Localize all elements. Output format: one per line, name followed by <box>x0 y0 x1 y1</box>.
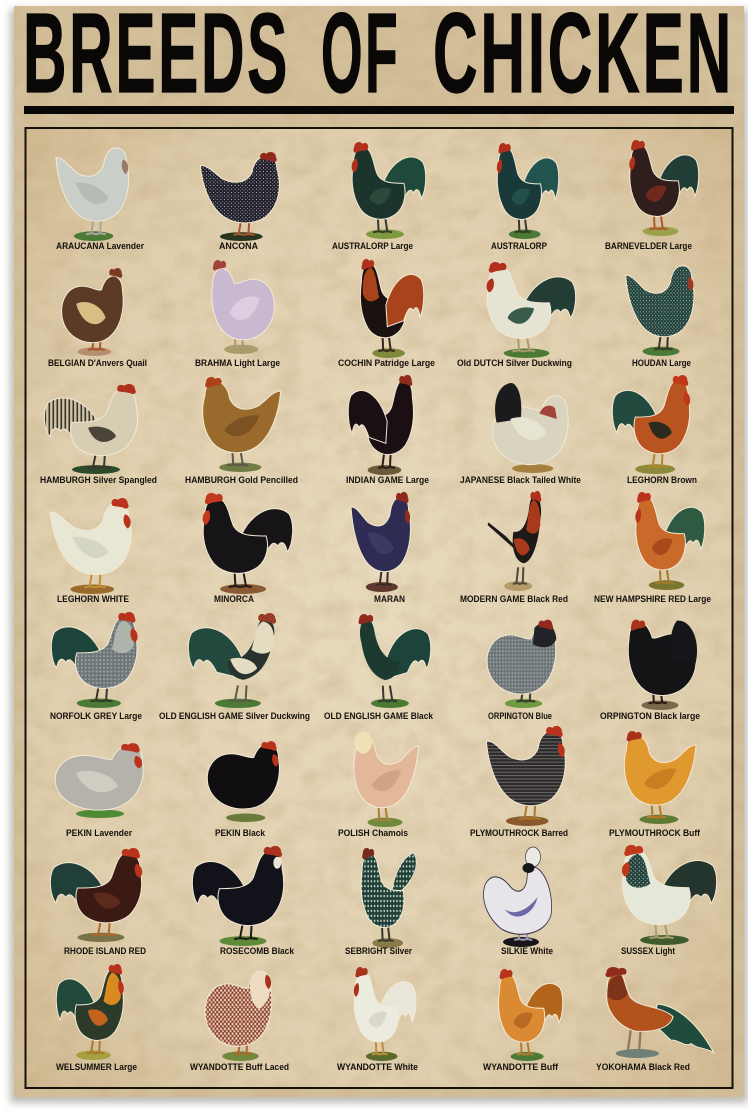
breed: Indian Game Large: INDIAN GAME Large <box>346 475 429 485</box>
breed: Araucana Lavender <box>56 148 144 251</box>
breed: Brahma Light Large <box>195 260 280 368</box>
breed: Yokohama Black Red: YOKOHAMA Black Red <box>596 1062 690 1072</box>
breed: Hamburgh Gold Pencilled: HAMBURGH Gold Pencilled <box>185 475 298 485</box>
breed: Polish Chamois <box>338 731 419 838</box>
breed: Wyandotte White: WYANDOTTE White <box>337 1062 418 1072</box>
breed: Leghorn Brown: LEGHORN Brown <box>627 475 697 485</box>
breed: Pekin Black <box>207 741 279 838</box>
breed: Wyandotte White <box>337 967 418 1072</box>
breed: Maran: MARAN <box>374 594 405 604</box>
breed: Barnevelder Large: BARNEVELDER Large <box>605 241 692 251</box>
breed: Leghorn White <box>50 498 131 604</box>
breed: Belgian D'Anvers Quail <box>48 268 147 368</box>
breed: Pekin Black: PEKIN Black <box>215 828 266 838</box>
breed: Modern Game Black Red <box>460 491 568 604</box>
breed: Cochin Partridge Large <box>338 259 435 368</box>
title rule <box>24 106 734 114</box>
breed: Rhode Island Red <box>50 848 146 956</box>
breed: Ancona: ANCONA <box>219 241 258 251</box>
breed: Indian Game Large <box>346 375 429 485</box>
breed: Rosecomb Black <box>192 846 295 956</box>
breed: Orpington Blue: ORPINGTON Blue <box>488 711 552 721</box>
breed: Old English Game Silver Duckwing: OLD ENGLISH GAME Silver Duckwing <box>159 711 310 721</box>
breed: Australorp Large: AUSTRALORP Large <box>332 241 413 251</box>
breed: Leghorn White: LEGHORN WHITE <box>57 594 129 604</box>
breed: Norfolk Grey Large: NORFOLK GREY Large <box>50 711 142 721</box>
breed: Minorca: MINORCA <box>214 594 254 604</box>
breed: Norfolk Grey Large <box>50 612 142 721</box>
breed: Australorp Large <box>332 142 426 251</box>
breed: Cochin Partridge Large: COCHIN Patridge Large <box>338 358 435 368</box>
breed: Wyandotte Buff <box>483 969 563 1072</box>
breed: Orpington Black Large: ORPINGTON Black large <box>600 711 700 721</box>
breed: Houdan Large: HOUDAN Large <box>632 358 691 368</box>
breed: Pekin Lavender: PEKIN Lavender <box>66 828 132 838</box>
breed: Barnevelder Large <box>605 140 699 251</box>
breed: Rhode Island Red: RHODE ISLAND RED <box>64 946 146 956</box>
breed: Welsummer Large: WELSUMMER Large <box>56 1062 137 1072</box>
breed: Australorp <box>491 143 559 251</box>
breed: Orpington Black Large <box>600 620 700 721</box>
breed: Hamburgh Gold Pencilled <box>185 377 298 485</box>
breed: Sussex Light <box>621 845 717 956</box>
breed: Belgian D'Anvers Quail: BELGIAN D'Anvers Quail <box>48 358 147 368</box>
breed: Wyandotte Buff Laced <box>190 970 289 1072</box>
breed: Sebright Silver: SEBRIGHT Silver <box>345 946 412 956</box>
breed: Plymouth Rock Barred: PLYMOUTHROCK Barred <box>470 828 568 838</box>
breed: Welsummer Large <box>56 964 137 1072</box>
breed: Minorca <box>203 493 293 604</box>
breed: New Hampshire Red Large <box>594 492 711 604</box>
breed: Old English Game Silver Duckwing <box>159 613 310 721</box>
breed: Old Dutch Silver Duckwing <box>457 262 576 368</box>
breed: Rosecomb Black: ROSECOMB Black <box>220 946 295 956</box>
breed: Old English Game Black <box>324 614 434 721</box>
breed: Plymouth Rock Buff <box>609 731 701 838</box>
breed: Houdan Large <box>626 266 694 368</box>
breed: Wyandotte Buff Laced: WYANDOTTE Buff Laced <box>190 1062 289 1072</box>
breed: Silkie White <box>484 847 553 956</box>
breed: Araucana Lavender: ARAUCANA Lavender <box>56 241 144 251</box>
breed: Old English Game Black: OLD ENGLISH GAME Black <box>324 711 434 721</box>
breed: New Hampshire Red Large: NEW HAMPSHIRE RED Large <box>594 594 711 604</box>
breed: Wyandotte Buff: WYANDOTTE Buff <box>483 1062 559 1072</box>
breed: Old Dutch Silver Duckwing: Old DUTCH Silver Duckwing <box>457 358 572 368</box>
breed: Hamburgh Silver Spangled <box>40 384 157 485</box>
breed: Leghorn Brown <box>612 375 697 485</box>
breed: Australorp: AUSTRALORP <box>491 241 547 251</box>
breed: Japanese Black Tailed White <box>460 383 581 485</box>
breed: Orpington Blue <box>487 620 556 721</box>
breed: Maran <box>351 492 410 604</box>
breed: Ancona <box>200 152 279 251</box>
breed: Yokohama Black Red <box>596 967 714 1072</box>
breed: Modern Game Black Red: MODERN GAME Black Red <box>460 594 568 604</box>
breed: Plymouth Rock Barred <box>470 726 568 838</box>
breed: Japanese Black Tailed White: JAPANESE Black Tailed White <box>460 475 581 485</box>
breed: Pekin Lavender <box>55 743 143 838</box>
breed: Silkie White: SILKIE White <box>501 946 553 956</box>
breed: Plymouth Rock Buff: PLYMOUTHROCK Buff <box>609 828 701 838</box>
breed: Sussex Light: SUSSEX Light <box>621 946 675 956</box>
breed: Sebright Silver <box>345 848 416 956</box>
breed: Polish Chamois: POLISH Chamois <box>338 828 408 838</box>
breed: Hamburgh Silver Spangled: HAMBURGH Silver Spangled <box>40 475 157 485</box>
breed: Brahma Light Large: BRAHMA Light Large <box>195 358 280 368</box>
